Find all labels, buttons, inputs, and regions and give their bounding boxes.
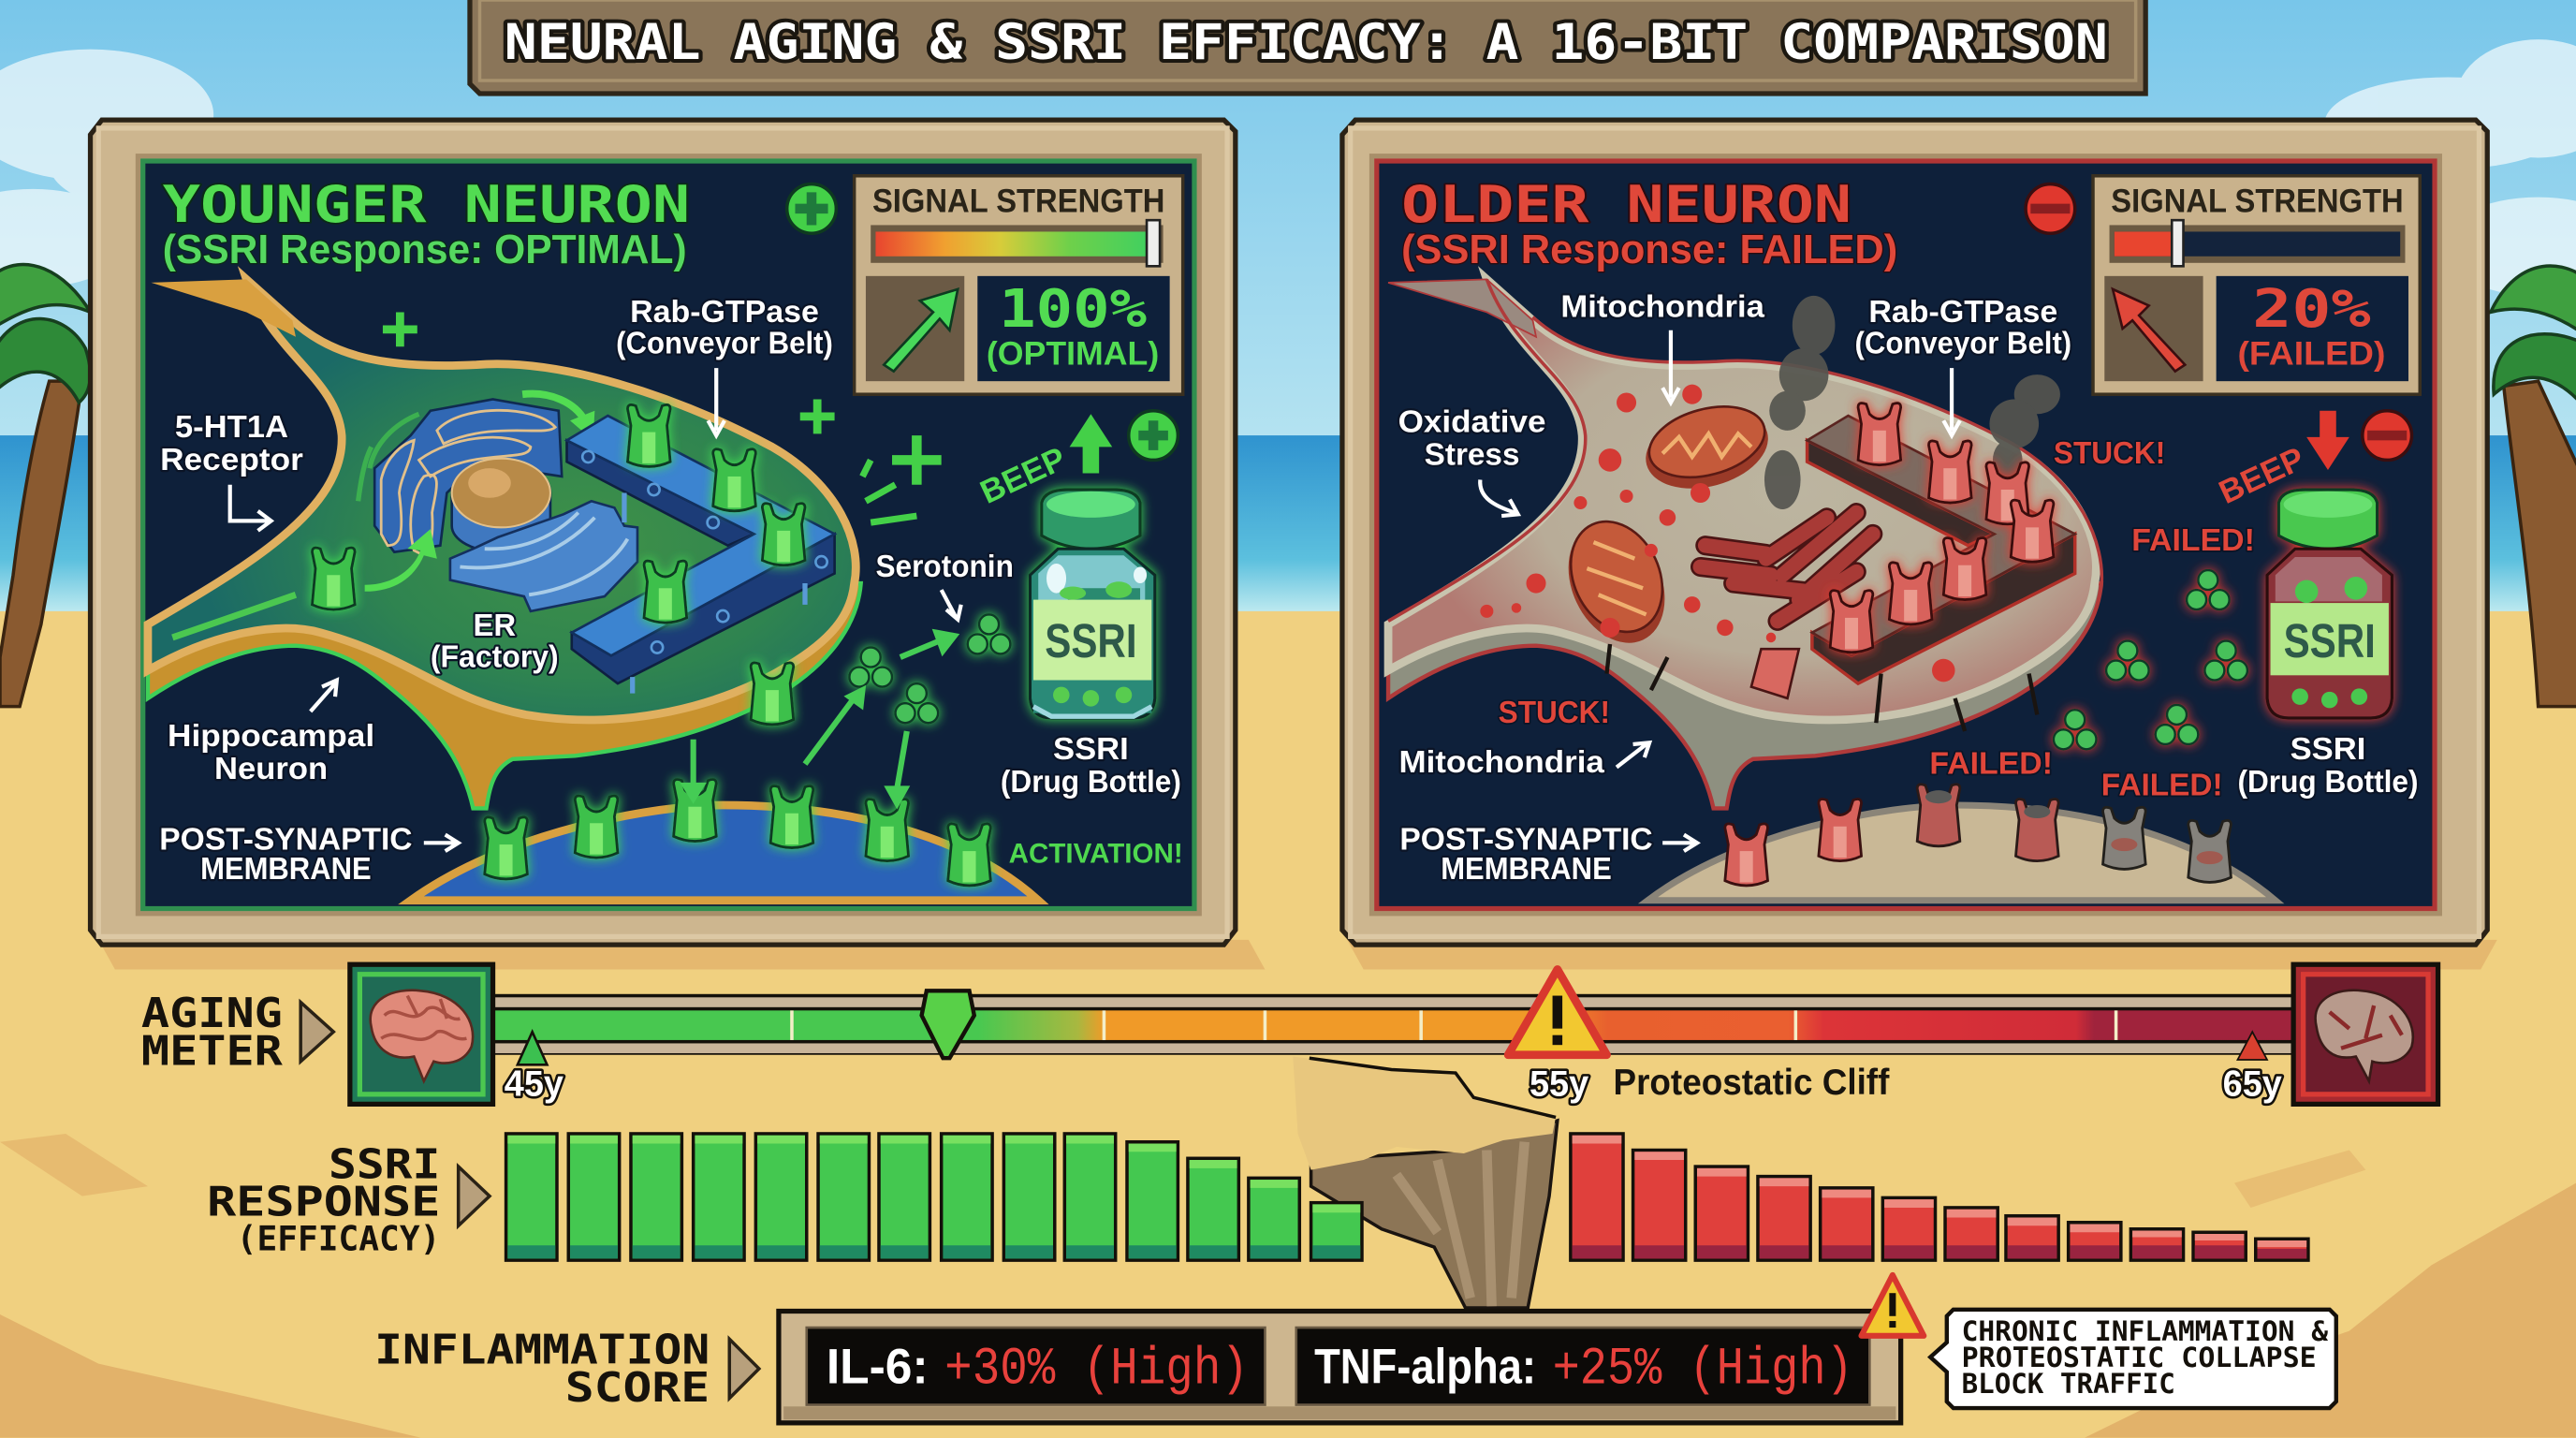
warning triangle [1862,1275,1924,1336]
panel: younger neuron [91,120,1236,945]
label: hippocampal neuron: Neuron [214,752,328,786]
icon: SSRI bottle [1030,490,1155,718]
label: Rab-GTPase: Rab-GTPase [630,295,819,330]
label: failed near bottle: FAILED! [2131,523,2255,558]
label: hippocampal neuron: Hippocampal [168,719,374,754]
label: 65y: 65y [2223,1064,2282,1105]
label: activation: ACTIVATION! [1009,838,1183,869]
icon: minus badge [2026,184,2075,233]
label: SSRI drug bottle: SSRI [2291,732,2365,767]
brain badge: old [2293,964,2438,1104]
label: aging meter [141,990,284,1075]
stuck receptors [1830,404,2054,653]
label: serotonin: Serotonin [875,550,1014,584]
smoke plumes [1764,296,2060,509]
label: 55y: 55y [1530,1064,1589,1105]
value box: 20%: 20% [2252,279,2371,340]
beep and up arrow [974,411,1178,511]
label: Rab-GTPase: (Conveyor Belt) [616,326,833,360]
serotonin molecules [849,614,1010,723]
readout: IL-6 [807,1328,1265,1405]
label: 5-HT1A receptor: 5-HT1A [175,410,288,445]
palm tree right [2491,266,2576,707]
icon: SSRI bottle: SSRI [1045,614,1137,668]
label: failed lower: FAILED! [2101,768,2223,802]
label: ER factory [431,609,559,675]
membrane band: older [1388,583,2101,808]
signal strength bar [2110,220,2405,266]
cliff [1293,1056,1558,1308]
inflammation score row [374,1275,2336,1423]
golgi stack [359,394,594,553]
red bars: collapse after cliff [1571,1134,2308,1260]
icon: SSRI bottle failing: SSRI [2284,614,2376,668]
brain badge: young [350,964,493,1104]
label: inflammation score: SCORE [565,1364,710,1412]
signal strength panel [855,176,1183,394]
marker: current age [922,990,974,1058]
label: failed center: FAILED! [1929,747,2053,782]
green flow arrow [365,529,437,592]
value box: 20%: (FAILED) [2237,336,2385,373]
outline: older [1388,279,2101,621]
readout: IL-6: IL-6: [827,1340,929,1395]
label: mitochondria lower: Mitochondria [1398,745,1604,780]
callout: chronic inflammation: BLOCK TRAFFIC [1962,1368,2175,1400]
label: post-synaptic membrane [159,822,459,887]
label: ER factory: (Factory) [431,640,559,675]
label: proteostatic cliff: Proteostatic Cliff [1614,1063,1889,1103]
label: inflammation score [374,1327,710,1412]
icon: plus badge [787,184,836,233]
signal strength label: SIGNAL STRENGTH [2111,183,2404,219]
arrow: aging meter [300,1003,333,1062]
arrow: inflammation [729,1339,759,1399]
arrow box: up [866,276,964,381]
subheading: SSRI response failed: (SSRI Response: FAILED) [1401,227,1897,272]
signal strength bar [871,220,1164,266]
label: Rab-GTPase [616,295,833,435]
label: 45y: 45y [505,1064,564,1105]
label: SSRI drug bottle: SSRI [1053,732,1129,767]
label: mitochondria top: Mitochondria [1560,290,1764,325]
aging meter row [141,964,2438,1105]
label: post-synaptic membrane: MEMBRANE [1441,852,1612,887]
dendrite branch: older [1388,279,1536,337]
label: post-synaptic membrane: POST-SYNAPTIC [1399,822,1653,857]
degraded receptors [1725,785,2231,886]
label: SSRI response efficacy: (EFFICACY) [237,1219,440,1259]
label: oxidative stress [1398,405,1546,516]
label: oxidative stress: Stress [1425,438,1519,473]
nucleus [452,459,550,552]
label: inflammation score: INFLAMMATION [374,1327,710,1374]
score panel [779,1312,1901,1423]
value box: 100% [977,276,1170,381]
readout: TNF-alpha: +25% (High) [1553,1340,1853,1400]
conveyor belt [567,416,835,694]
label: SSRI drug bottle: (Drug Bottle) [2237,765,2419,800]
label: serotonin [875,550,1014,620]
warning triangle: proteostatic cliff [1508,969,1606,1055]
label: post-synaptic membrane [1399,822,1697,887]
neuron illustration: younger [148,279,861,808]
callout: chronic inflammation: CHRONIC INFLAMMATION & [1962,1315,2329,1347]
cell body: younger [148,279,856,720]
broken conveyor belt [1808,416,2075,683]
label: aging meter: AGING [141,990,283,1037]
neuron illustration: older [1388,279,2101,808]
label: post-synaptic membrane: MEMBRANE [200,852,372,887]
cracks [1606,644,2037,731]
beep and down arrow [2214,411,2411,511]
signal strength label: SIGNAL STRENGTH [872,183,1164,219]
label: SSRI response efficacy [207,1140,440,1259]
ruined ER [1701,513,1873,621]
mitochondria [1550,395,1777,659]
arrow box: failing [2104,276,2203,381]
plus signs and sparks [383,312,942,522]
label: 5-HT1A receptor: Receptor [160,443,303,477]
cell body: older [1388,279,2096,720]
label: SSRI drug bottle [2237,732,2419,800]
signal strength panel [2093,176,2420,394]
palm tree left [0,265,91,707]
arrow: SSRI response [459,1167,490,1225]
readout: TNF-alpha: TNF-alpha: [1314,1340,1536,1395]
oxidative dots [1480,385,1955,682]
callout: chronic inflammation: PROTEOSTATIC COLLAPSE [1962,1342,2317,1373]
label: SSRI drug bottle: (Drug Bottle) [1001,765,1181,800]
label: Rab-GTPase: Rab-GTPase [1868,295,2057,330]
value box: 100%: 100% [999,279,1147,340]
label: ER factory: ER [473,609,516,643]
label: post-synaptic membrane: POST-SYNAPTIC [159,822,413,857]
receptors on conveyor [312,404,805,725]
callout: chronic inflammation [1930,1310,2336,1408]
label: aging meter: METER [141,1027,284,1075]
subheading: SSRI response optimal: (SSRI Response: OPTIMAL) [163,227,687,272]
label: SSRI response efficacy: SSRI [329,1140,440,1188]
label: SSRI response efficacy: RESPONSE [207,1179,440,1226]
label: Rab-GTPase: (Conveyor Belt) [1855,326,2071,360]
heading: younger neuron: YOUNGER NEURON [163,175,690,234]
label: Rab-GTPase [1855,295,2071,435]
beep and up arrow: BEEP [974,440,1072,511]
endoplasmic reticulum [450,501,637,611]
title banner [470,0,2145,94]
membrane band: younger [148,583,861,808]
marker: 45y [518,1032,547,1064]
meter bar [490,994,2297,1055]
green bars: responders before cliff [506,1134,1362,1260]
panel: older neuron [1342,120,2487,945]
post-synaptic membrane failing [1647,805,2276,901]
value box: 20% [2217,276,2408,381]
label: stuck lower: STUCK! [1499,696,1610,730]
bar highlights and shades green [507,1136,1360,1258]
beep and down arrow: BEEP [2214,440,2310,511]
heading: older neuron: OLDER NEURON [1401,175,1852,234]
label: mitochondria top [1560,290,1764,403]
icon: SSRI bottle failing [2267,490,2392,718]
SSRI response row [207,1134,2308,1260]
label: stuck top: STUCK! [2054,436,2165,471]
dendrite branch: younger [151,279,296,337]
value box: 100%: (OPTIMAL) [987,336,1159,373]
title banner: NEURAL AGING & SSRI EFFICACY: A 16-BIT COMPARISON [505,14,2108,71]
label: oxidative stress: Oxidative [1398,405,1546,440]
readout: IL-6: +30% (High) [944,1340,1249,1400]
label: hippocampal neuron [168,681,374,786]
green serotonin arrows [685,633,955,803]
post-synaptic membrane [411,805,1038,901]
receptors on membrane [485,779,990,886]
label: SSRI drug bottle [1001,732,1181,800]
bar highlights and shades red [1573,1136,2306,1258]
readout: TNF-alpha [1296,1328,1869,1405]
marker: 65y [2237,1032,2267,1060]
label: 5-HT1A receptor [160,410,303,531]
serotonin molecules failing [2054,570,2247,749]
